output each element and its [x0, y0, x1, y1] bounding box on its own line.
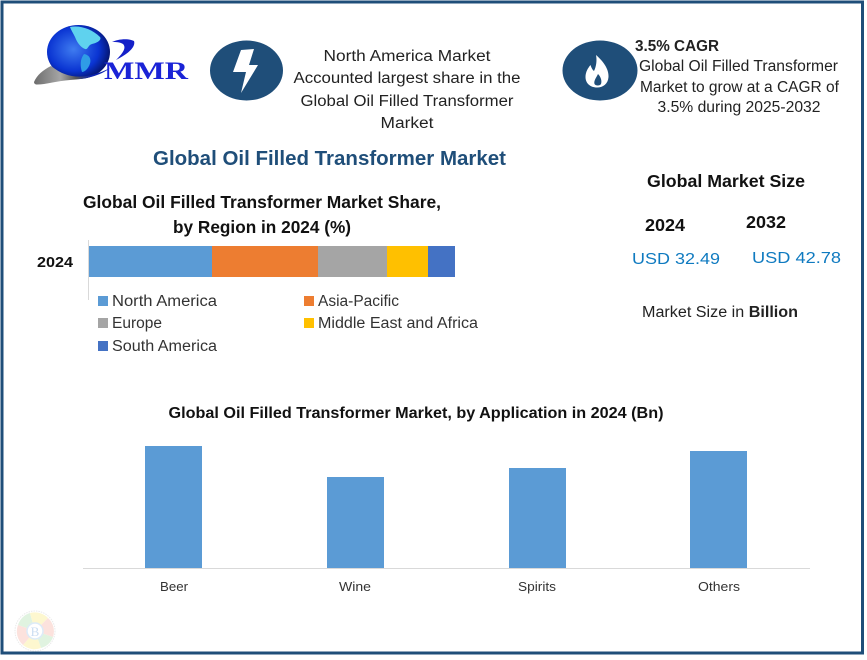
- bar chart: application: Wine: [339, 579, 371, 594]
- note: market size unit: Market Size in Billion: [642, 304, 798, 321]
- legend: regions: North America: [112, 293, 217, 310]
- panel: global market size: [632, 171, 841, 321]
- icon: watermark badge: B: [31, 624, 40, 639]
- legend: regions: South America: [112, 338, 217, 355]
- icon: MMR logo: MMR: [104, 58, 189, 85]
- callout: CAGR: 3.5% CAGR: [635, 38, 719, 55]
- value 2032: USD 42.78: [752, 250, 841, 267]
- callout: CAGR: Market to grow at a CAGR of: [640, 79, 840, 96]
- icon: watermark badge: [15, 611, 55, 651]
- icon: lightning bolt badge: [210, 40, 283, 100]
- icon: MMR logo: [34, 25, 189, 85]
- heading: application chart: Global Oil Filled Transformer Market, by Application in 2024 (Bn): [168, 405, 664, 422]
- year 2024: 2024: [645, 215, 685, 235]
- bar chart: application: Beer: [160, 579, 189, 594]
- legend: regions: Asia-Pacific: [318, 293, 399, 310]
- legend: regions: [98, 293, 478, 355]
- heading: market share chart: by Region in 2024 (%): [173, 217, 351, 237]
- bar chart: application: [83, 446, 810, 594]
- value 2024: USD 32.49: [632, 251, 720, 268]
- callout: North America share: Global Oil Filled Transformer: [300, 93, 514, 110]
- callout: CAGR: 3.5% during 2025-2032: [658, 99, 820, 116]
- callout: CAGR: [635, 38, 840, 116]
- heading: market share chart: [83, 192, 441, 237]
- legend: regions: Europe: [112, 315, 162, 332]
- year 2032: 2032: [746, 212, 786, 232]
- legend: regions: Middle East and Africa: [318, 315, 478, 332]
- stacked bar chart: region share: 2024: [37, 255, 73, 271]
- callout: North America share: North America Market: [324, 48, 491, 65]
- bar chart: application: Others: [698, 579, 741, 594]
- callout: CAGR: Global Oil Filled Transformer: [639, 58, 838, 75]
- heading: market share chart: Global Oil Filled Transformer Market Share,: [83, 192, 441, 212]
- main title: Global Oil Filled Transformer Market: [153, 148, 506, 170]
- callout: North America share: Accounted largest share in the: [294, 70, 520, 87]
- icon: flame badge: [562, 40, 638, 100]
- heading: global market size: Global Market Size: [647, 171, 805, 191]
- callout: North America share: Market: [380, 115, 434, 132]
- callout: North America share: [294, 48, 520, 132]
- stacked bar chart: region share: [37, 240, 455, 300]
- bar chart: application: Spirits: [518, 579, 557, 594]
